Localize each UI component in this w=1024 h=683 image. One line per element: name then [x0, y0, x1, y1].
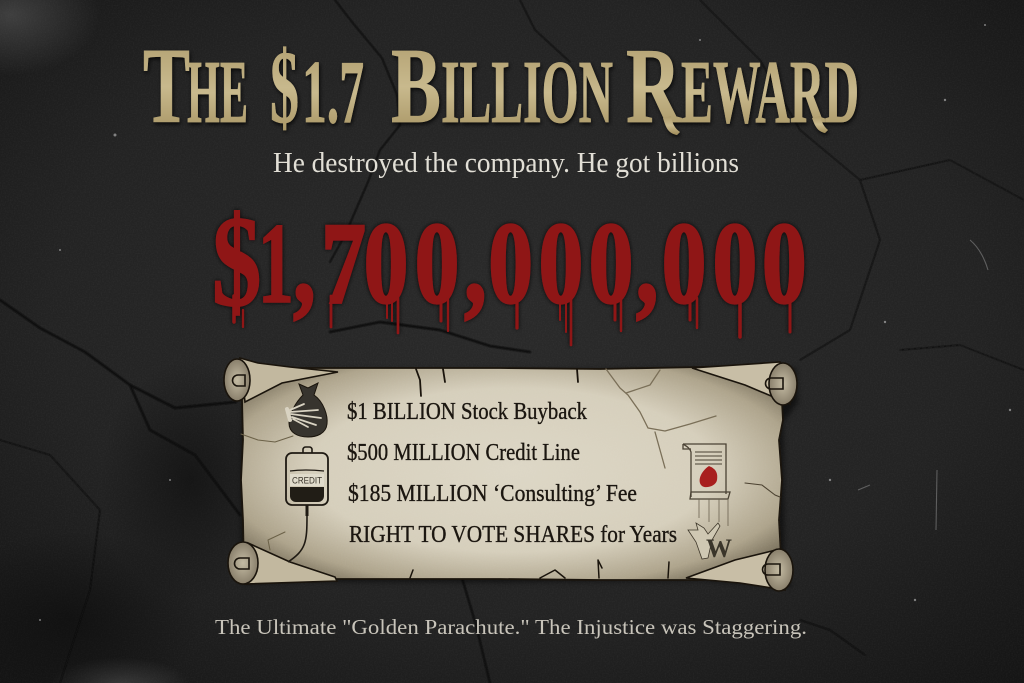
icon: puppet hand with W: W [706, 534, 732, 563]
line: voting rights: RIGHT TO VOTE SHARES for Years [349, 521, 677, 548]
blood-red amount with drips: $ [212, 189, 261, 333]
title [143, 27, 859, 146]
blood-red amount with drips: ,700,000,000 [293, 200, 806, 328]
icon: credit blood bag with tube [286, 447, 328, 562]
list of payouts [347, 398, 677, 548]
icon: contract with red seal [683, 444, 730, 526]
parchment cracks [241, 369, 780, 578]
subtitle: He destroyed the company. He got billions [273, 147, 739, 179]
title: EWARD [681, 43, 859, 142]
panel: parchment scroll [224, 358, 798, 591]
title: 1.7 [302, 43, 364, 142]
title: $ [270, 30, 299, 145]
title: R [626, 27, 682, 146]
scroll corner rolls [224, 358, 797, 591]
line: stock buyback: $1 BILLION Stock Buyback [347, 398, 588, 425]
line: credit line: $500 MILLION Credit Line [347, 439, 580, 466]
icon: puppet hand with W [688, 523, 732, 563]
title: ILLION [441, 43, 613, 142]
footer caption: The Ultimate "Golden Parachute." The Injustice was Staggering. [215, 615, 807, 639]
icon: credit blood bag with tube: CREDIT [292, 476, 322, 486]
blood-red amount with drips: 1 [258, 199, 294, 327]
title: B [391, 27, 441, 146]
line: consulting fee: $185 MILLION ‘Consulting’ Fee [348, 480, 637, 507]
title: T [143, 27, 190, 146]
title: HE [187, 43, 248, 142]
icon: money bag with skeleton hand [287, 383, 327, 437]
